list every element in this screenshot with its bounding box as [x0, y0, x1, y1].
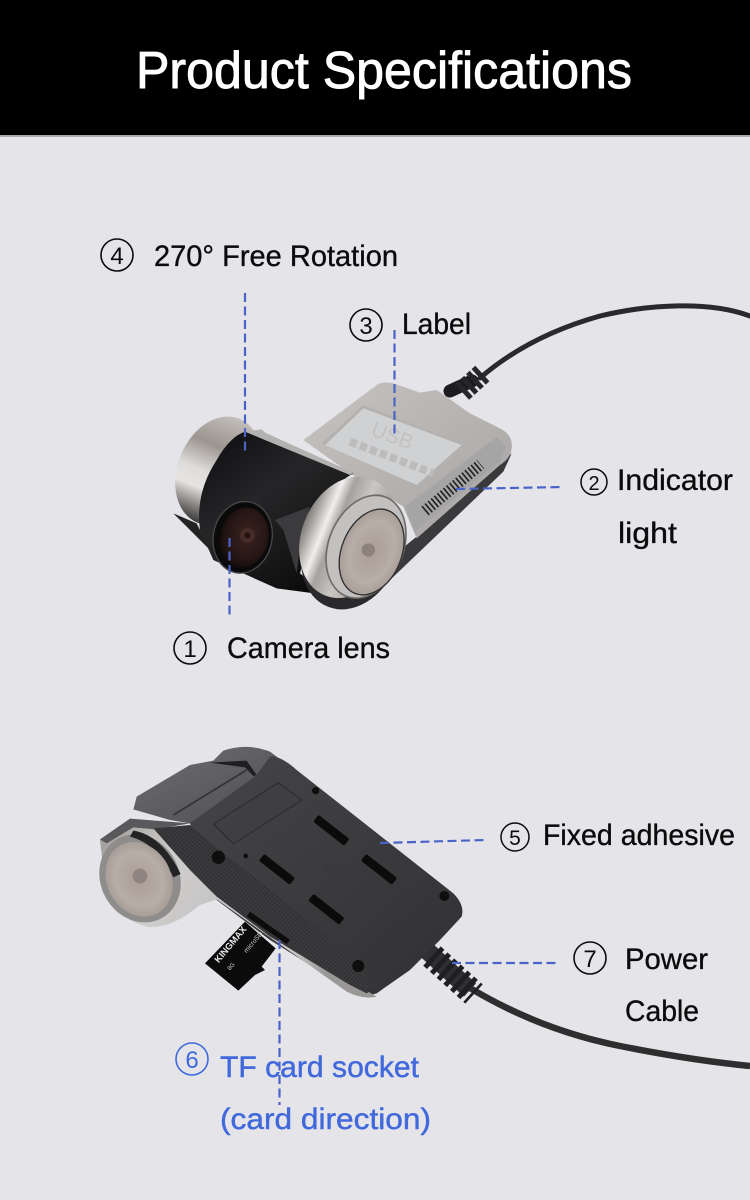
- black lens housing: [199, 432, 353, 595]
- printed label on plate: USB: [368, 418, 416, 454]
- power cable, front view: [450, 306, 750, 392]
- label 2: indicator light: light: [618, 517, 678, 550]
- chrome side trim: [100, 820, 377, 998]
- label 2: indicator light: Indicator: [617, 464, 733, 497]
- indicator light vents: [425, 464, 481, 511]
- label 1: camera lens: 1: [183, 636, 197, 663]
- rear plate: [190, 756, 462, 995]
- label 4: rotation: 270° Free Rotation: [154, 240, 398, 273]
- label 7: power cable: [574, 942, 708, 1028]
- camera body in 3x coordinates: [160, 382, 512, 625]
- label 6: TF card socket: [176, 1043, 431, 1136]
- label 3: label: Label: [402, 308, 471, 341]
- photo: dash camera front view: [160, 306, 750, 625]
- metal top plate: [303, 382, 512, 580]
- label 3: label: [350, 308, 471, 341]
- label 6: TF card socket: TF card socket: [220, 1051, 420, 1084]
- label 4: rotation: 4: [110, 243, 124, 270]
- power cable, rear view: [422, 946, 750, 1066]
- label 2: indicator light: [581, 464, 733, 550]
- knurled side band: [153, 825, 377, 993]
- label 7: power cable: Power: [625, 943, 708, 976]
- title: Product Specifications: [136, 42, 632, 100]
- label 3: label: 3: [359, 313, 373, 340]
- dashed leader lines: [230, 293, 562, 1105]
- label 5: fixed adhesive: 5: [509, 827, 521, 850]
- label 7: power cable: Cable: [625, 995, 699, 1028]
- microSD card: KINGMAX: [213, 924, 249, 965]
- microSD card: 8G: [227, 962, 237, 972]
- housing gloss: [275, 507, 310, 573]
- label 6: TF card socket: (card direction): [220, 1103, 431, 1136]
- photo: dash camera rear view: [84, 747, 462, 998]
- grey trim band: [100, 819, 190, 843]
- left chrome end cap: [160, 404, 277, 550]
- header band: [0, 0, 750, 137]
- microSD card: microSD: [243, 930, 265, 955]
- label 6: TF card socket: 6: [185, 1047, 199, 1074]
- hinge seam: [173, 770, 247, 815]
- label 1: camera lens: Camera lens: [227, 632, 390, 665]
- microSD card: [205, 922, 276, 991]
- grey hinge wing: [133, 747, 297, 823]
- screw holes: [212, 787, 449, 972]
- lens: [206, 496, 279, 579]
- label 2: indicator light: 2: [588, 473, 600, 495]
- round metal disc: [84, 820, 196, 937]
- housing highlight: [245, 429, 353, 475]
- hinge shadow slot: [210, 761, 257, 776]
- right chrome end cap: [282, 462, 421, 625]
- label 7: power cable: 7: [583, 946, 597, 973]
- card socket: [247, 912, 290, 944]
- label 5: fixed adhesive: Fixed adhesive: [543, 819, 735, 852]
- printed label on plate: [325, 408, 462, 485]
- recessed panel: [213, 783, 302, 844]
- mounting slots: [259, 815, 397, 925]
